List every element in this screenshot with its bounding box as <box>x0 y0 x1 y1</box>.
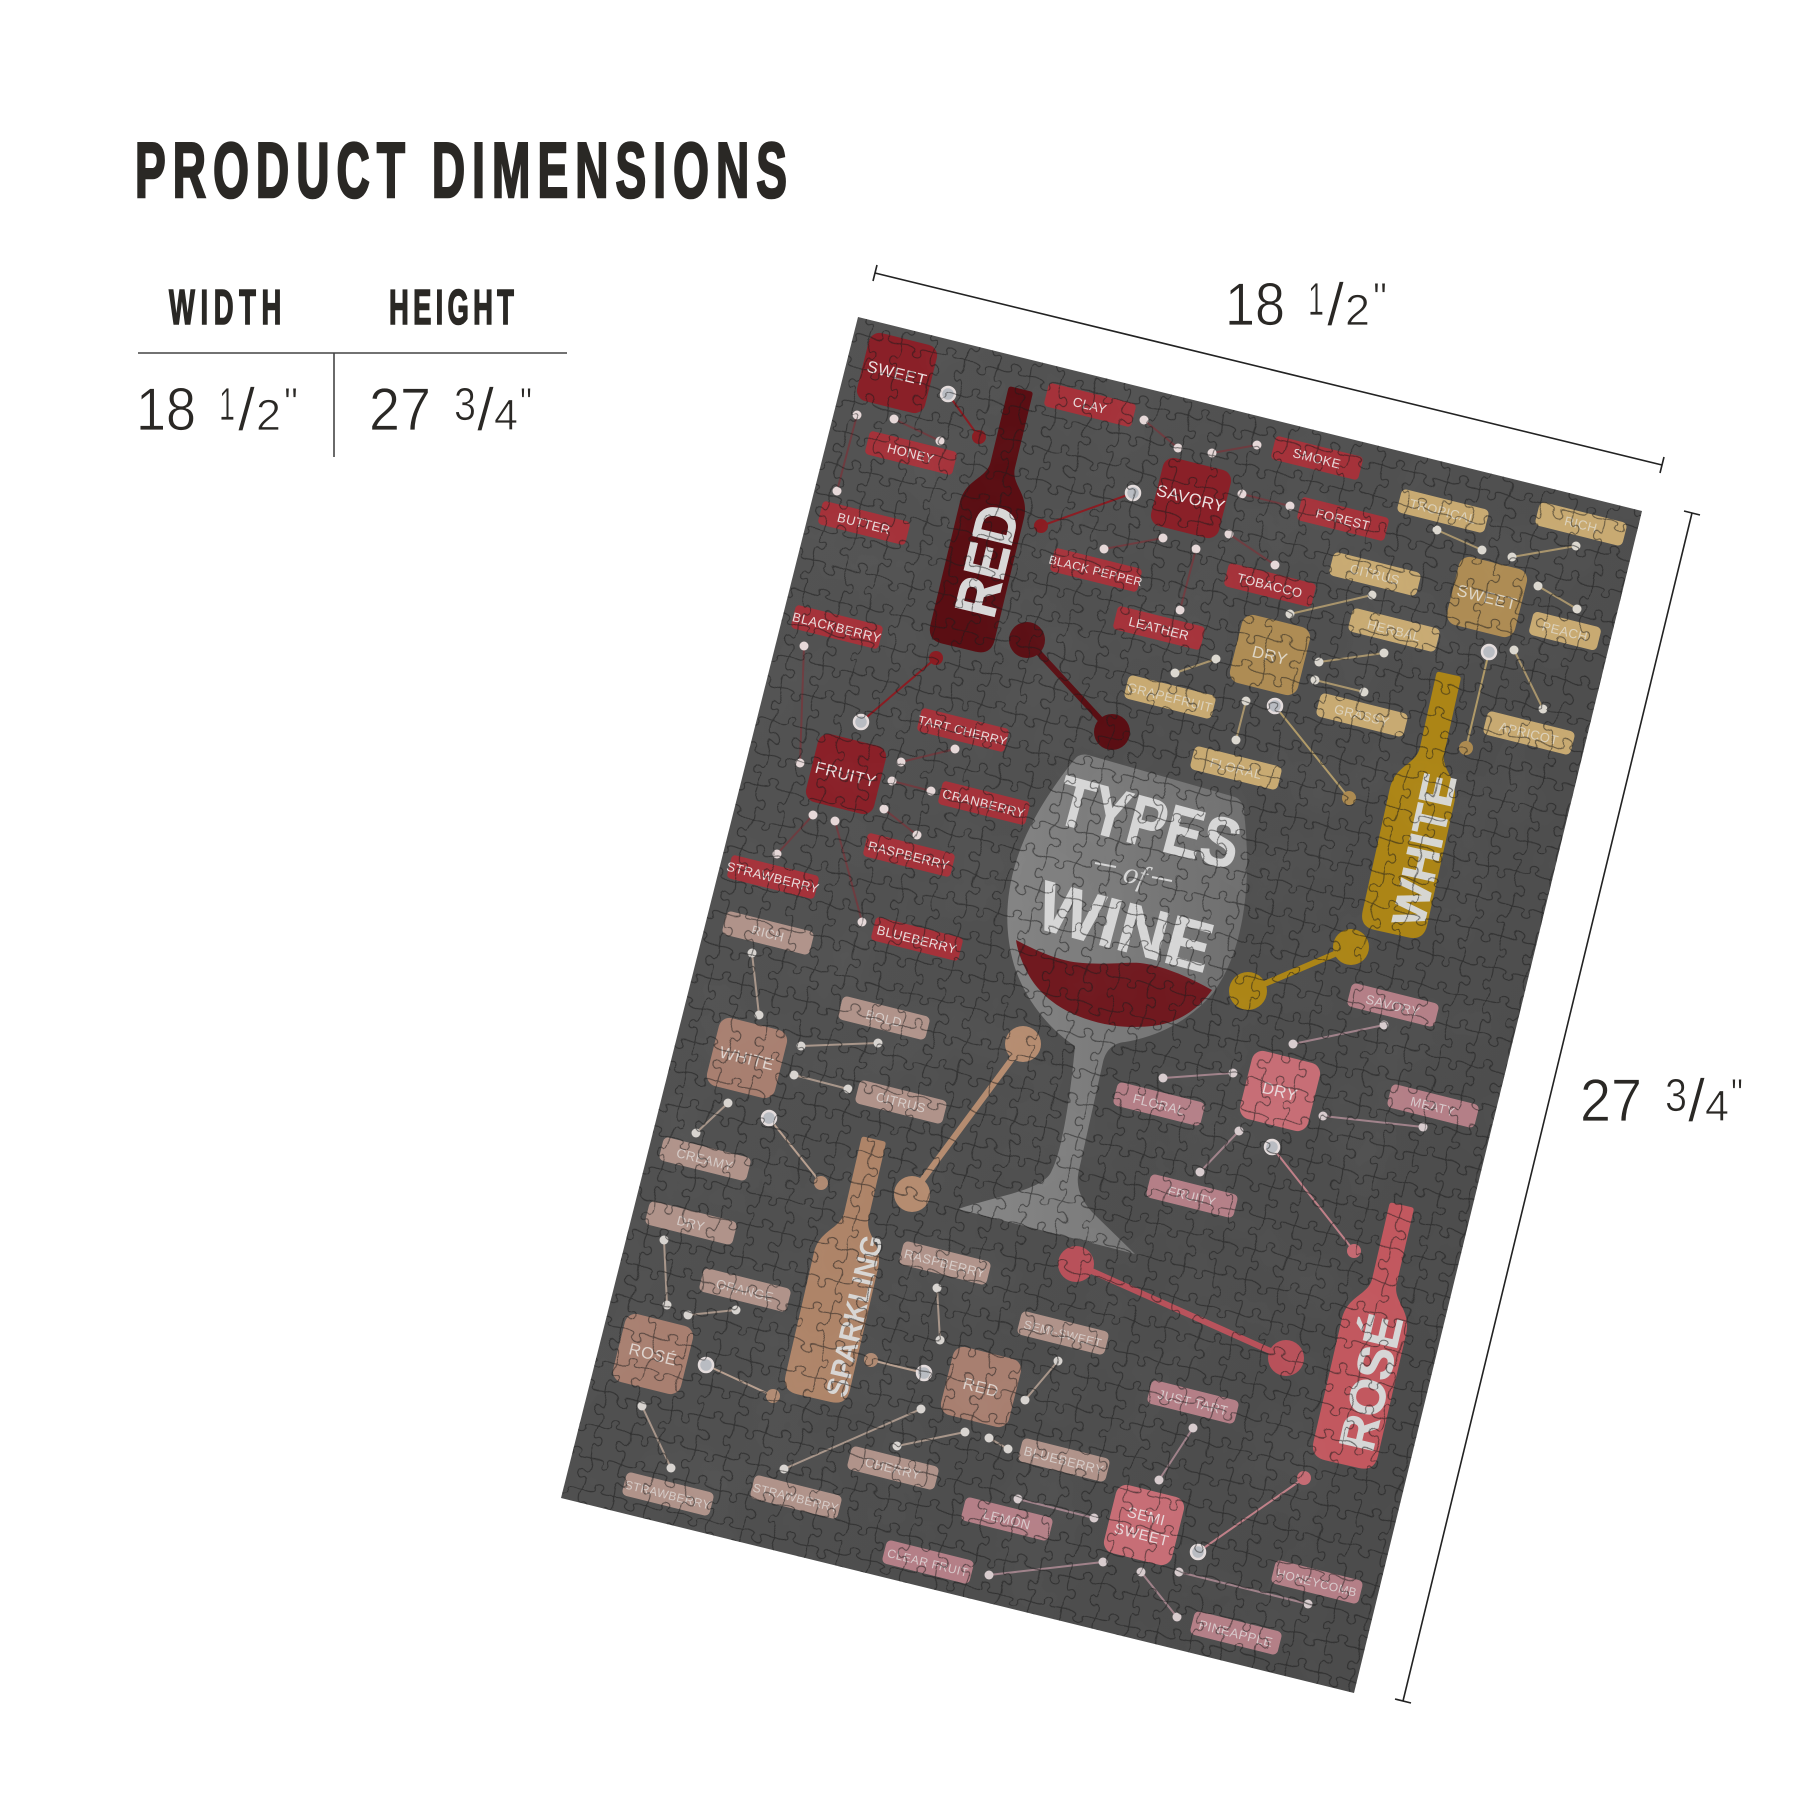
connector <box>638 1402 676 1472</box>
value: width 18 1/2: 18 <box>136 376 196 443</box>
label: clay <box>1043 382 1137 428</box>
label: rich <box>721 910 815 956</box>
connector <box>1310 676 1368 696</box>
connector <box>984 1558 1108 1580</box>
connector <box>1170 654 1220 678</box>
category: white: WHITE <box>718 1044 776 1074</box>
label: bold <box>837 995 931 1041</box>
value: height 27 3/4: 4 <box>494 391 518 440</box>
connector: red to bottle <box>864 1353 931 1380</box>
dimension label: right 27 3/4: 3 <box>1665 1069 1687 1121</box>
category: red: RED <box>961 1375 1001 1401</box>
value: height 27 3/4: " <box>520 379 532 428</box>
label: rich: RICH <box>1563 513 1599 536</box>
connector <box>1176 544 1200 614</box>
connector <box>932 1284 944 1344</box>
label: floral <box>1112 1081 1206 1127</box>
dimension label: right 27 3/4: / <box>1688 1067 1705 1134</box>
rosé group <box>881 982 1480 1656</box>
label: cherry <box>846 1445 940 1491</box>
red group <box>724 331 1390 962</box>
connector <box>692 1098 732 1138</box>
dimension label: top 18 1/2: 1 <box>1308 273 1324 325</box>
category: savory: SAVORY <box>1154 482 1227 516</box>
category: rosé <box>611 1312 695 1396</box>
label: peach: PEACH <box>1540 619 1589 644</box>
label: citrus: CITRUS <box>1348 561 1401 588</box>
connector <box>796 1038 882 1050</box>
connector <box>796 642 808 768</box>
bottle: white: WHITE <box>1381 768 1467 931</box>
value: width 18 1/2: 1 <box>219 378 235 430</box>
label: peach <box>1528 611 1602 651</box>
category: semi sweet <box>1102 1483 1186 1567</box>
label: meaty: MEATY <box>1409 1094 1457 1119</box>
label: floral <box>1189 745 1283 791</box>
value: width 18 1/2 <box>136 376 298 443</box>
label: honeycomb <box>1270 1559 1364 1605</box>
category: fruity <box>804 732 888 816</box>
wine glass <box>958 755 1249 1254</box>
label: citrus <box>854 1079 948 1125</box>
connector <box>832 410 862 496</box>
panel: puzzle poster <box>500 250 1700 1750</box>
value: height 27 3/4: / <box>477 376 494 443</box>
label: clay: CLAY <box>1071 394 1108 417</box>
connector <box>1238 490 1294 510</box>
label: clear fruit: CLEAR FRUIT <box>886 1546 970 1580</box>
connector <box>1136 1568 1182 1622</box>
glass title: of <box>1120 856 1155 895</box>
connector <box>1154 1424 1198 1484</box>
label: butter: BUTTER <box>836 510 892 537</box>
connector <box>1196 1126 1244 1176</box>
connector <box>1232 696 1250 744</box>
label: lemon <box>960 1496 1054 1542</box>
dimension label: top 18 1/2: 2 <box>1345 286 1370 335</box>
label: butter <box>817 500 911 546</box>
category: white <box>705 1016 789 1100</box>
label: lemon: LEMON <box>982 1506 1032 1533</box>
label: grassy <box>1315 692 1409 738</box>
label: cranberry: CRANBERRY <box>941 786 1027 821</box>
category: rosé: ROSÉ <box>627 1339 679 1370</box>
value: height 27 3/4 <box>369 376 532 443</box>
connector <box>1510 646 1548 714</box>
connector <box>660 1236 672 1310</box>
label: savory: SAVORY <box>1364 992 1422 1019</box>
category: dry: DRY <box>1250 643 1289 669</box>
label: rich: RICH <box>750 922 786 945</box>
dimension line: right height <box>1395 511 1700 1703</box>
connector <box>1020 1356 1062 1404</box>
connector <box>1314 648 1388 666</box>
category: fruity: FRUITY <box>813 759 878 791</box>
label: grapefruit: GRAPEFRUIT <box>1125 680 1214 715</box>
label: savory <box>1346 982 1440 1028</box>
connector: sweet to bottle <box>941 387 986 444</box>
connector <box>1286 590 1376 618</box>
connector <box>984 1434 1012 1454</box>
connector <box>772 810 818 858</box>
label: dry: DRY <box>675 1213 706 1234</box>
label: fruity: FRUITY <box>1166 1183 1218 1210</box>
connector <box>1508 542 1580 562</box>
connector <box>1100 534 1168 554</box>
label: strawberry: STRAWBERRY <box>623 1478 712 1512</box>
label: forest: FOREST <box>1314 506 1371 533</box>
label: blackberry: BLACKBERRY <box>791 609 883 646</box>
label: clear fruit <box>881 1539 975 1585</box>
category: sweet <box>855 331 939 415</box>
category: semi sweet: SEMI <box>1125 1504 1167 1530</box>
label: apricot <box>1482 710 1576 756</box>
dimension label: top 18 1/2: / <box>1327 271 1344 338</box>
label: forest <box>1296 496 1390 542</box>
label: tropical: TROPICAL <box>1408 496 1478 527</box>
connector: rosé bottle to glass <box>1058 1246 1304 1376</box>
category: sweet <box>1445 555 1529 639</box>
label: bold: BOLD <box>864 1007 904 1030</box>
label: orange: ORANGE <box>715 1276 775 1305</box>
connector <box>1288 1020 1388 1048</box>
category: red <box>939 1345 1023 1429</box>
label: dry <box>644 1200 738 1246</box>
label: honey <box>864 430 958 476</box>
label: honey: HONEY <box>886 440 936 467</box>
bottle: rosé: ROSÉ <box>1328 1309 1414 1456</box>
label: creamy <box>658 1136 752 1182</box>
connector: dry to bottle <box>1268 699 1356 805</box>
label: strawberry: STRAWBERRY <box>751 1481 840 1515</box>
category: dry: DRY <box>1260 1079 1299 1105</box>
label: black pepper: BLACK PEPPER <box>1047 553 1144 589</box>
label: leather: LEATHER <box>1127 614 1191 643</box>
label: strawberry: STRAWBERRY <box>725 859 821 896</box>
category: dry <box>1238 1049 1322 1133</box>
bottle: rosé <box>1310 1198 1439 1473</box>
connector <box>830 816 866 926</box>
label: floral: FLORAL <box>1131 1091 1186 1118</box>
title: product dimensions: PRODUCT DIMENSIONS <box>135 126 794 214</box>
connector <box>1224 530 1280 570</box>
connector <box>1014 1494 1098 1522</box>
column heading: width: WIDTH <box>169 281 287 335</box>
label: raspberry: RASPBERRY <box>903 1246 987 1281</box>
connector <box>1140 416 1182 452</box>
white group <box>1123 488 1628 1010</box>
connector: sparkling bottle to glass <box>894 1026 1041 1212</box>
value: width 18 1/2: " <box>284 379 298 428</box>
connector <box>888 776 936 796</box>
category: sweet: SWEET <box>1455 582 1519 614</box>
connector <box>890 414 944 446</box>
label: tobacco: TOBACCO <box>1236 570 1304 601</box>
label: blueberry <box>870 916 964 962</box>
dimensions table <box>136 281 567 457</box>
connector <box>896 744 960 766</box>
label: citrus: CITRUS <box>874 1089 927 1116</box>
label: herbal <box>1347 607 1441 653</box>
connector <box>790 1070 852 1094</box>
connector <box>892 1428 970 1450</box>
label: tart cherry: TART CHERRY <box>917 713 1009 749</box>
label: raspberry: RASPBERRY <box>867 838 951 873</box>
connector <box>1534 582 1582 614</box>
label: meaty <box>1386 1083 1480 1129</box>
glass title: WINE <box>1029 866 1221 988</box>
bottle: white <box>1359 667 1488 942</box>
label: pineapple: PINEAPPLE <box>1197 1617 1274 1650</box>
connector: semi sweet to bottle <box>1191 1471 1311 1559</box>
value: width 18 1/2: 2 <box>256 391 281 440</box>
connector <box>1174 1568 1312 1608</box>
connector: red bottle to glass <box>1009 622 1130 750</box>
label: smoke <box>1270 435 1364 481</box>
dimension label: right 27 3/4 <box>1580 1067 1743 1134</box>
dimension line: top width <box>873 265 1664 473</box>
category: dry <box>1228 613 1312 697</box>
sparkling group <box>611 910 1111 1520</box>
connector: white bottle to glass <box>1229 929 1369 1010</box>
connector: fruity to bottle <box>854 651 943 729</box>
connector: sweet to bottle <box>1459 645 1496 755</box>
label: semi-sweet <box>1016 1310 1110 1356</box>
connector <box>780 1404 926 1474</box>
label: pineapple <box>1189 1610 1283 1656</box>
bottle: sparkling <box>782 1132 911 1407</box>
label: apricot: APRICOT <box>1498 719 1560 748</box>
connector <box>1432 526 1486 554</box>
label: blueberry <box>1017 1437 1111 1483</box>
value: width 18 1/2: / <box>238 376 255 443</box>
dimension label: top 18 1/2: 18 <box>1225 271 1285 338</box>
label: floral: FLORAL <box>1208 755 1263 782</box>
label: leather <box>1112 605 1206 651</box>
value: height 27 3/4: 3 <box>454 378 476 430</box>
label: cherry: CHERRY <box>863 1454 922 1483</box>
label: tropical <box>1396 488 1490 534</box>
column heading: height: HEIGHT <box>389 281 518 335</box>
label: creamy: CREAMY <box>675 1145 735 1174</box>
label: honeycomb: HONEYCOMB <box>1275 1566 1358 1600</box>
bottle: red <box>927 381 1060 657</box>
bottle: sparkling: SPARKLING <box>820 1232 890 1400</box>
label: fruity <box>1145 1173 1239 1219</box>
label: rich <box>1534 501 1628 547</box>
connector: savory to bottle <box>1034 486 1140 533</box>
category: semi sweet: SWEET <box>1112 1520 1171 1550</box>
connector: white to bottle <box>762 1111 828 1190</box>
glass title: TYPES <box>1049 761 1249 885</box>
connector <box>880 804 922 840</box>
label: blueberry: BLUEBERRY <box>875 922 959 957</box>
label: blueberry: BLUEBERRY <box>1022 1443 1106 1478</box>
glass title <box>1029 761 1249 988</box>
dimension label: top 18 1/2: " <box>1373 274 1387 323</box>
label: just tart <box>1146 1379 1240 1425</box>
bottle: red: RED <box>943 499 1032 623</box>
dimension label: right 27 3/4: " <box>1731 1070 1743 1119</box>
label: herbal: HERBAL <box>1366 617 1422 644</box>
connector: dry to bottle <box>1265 1140 1361 1258</box>
label: semi-sweet: SEMI-SWEET <box>1022 1317 1104 1351</box>
dimension label: top 18 1/2 <box>1225 271 1387 338</box>
label: orange <box>698 1267 792 1313</box>
label: grassy: GRASSY <box>1333 701 1391 730</box>
connector <box>684 1306 740 1320</box>
connector <box>1158 1068 1238 1082</box>
connector <box>1318 1112 1428 1132</box>
label: smoke: SMOKE <box>1291 445 1342 472</box>
category: sweet: SWEET <box>865 358 929 390</box>
label: tobacco <box>1223 562 1317 608</box>
value: height 27 3/4: 27 <box>369 376 431 443</box>
connector <box>748 948 764 1020</box>
dimension label: right 27 3/4: 27 <box>1580 1067 1642 1134</box>
connector: rosé to bottle <box>699 1358 780 1403</box>
connector <box>1208 440 1262 458</box>
label: citrus <box>1328 551 1422 597</box>
category: savory <box>1148 456 1234 540</box>
red wine in glass <box>1016 940 1212 1027</box>
label: just tart: JUST TART <box>1156 1387 1230 1418</box>
dimension label: right 27 3/4: 4 <box>1705 1082 1729 1131</box>
